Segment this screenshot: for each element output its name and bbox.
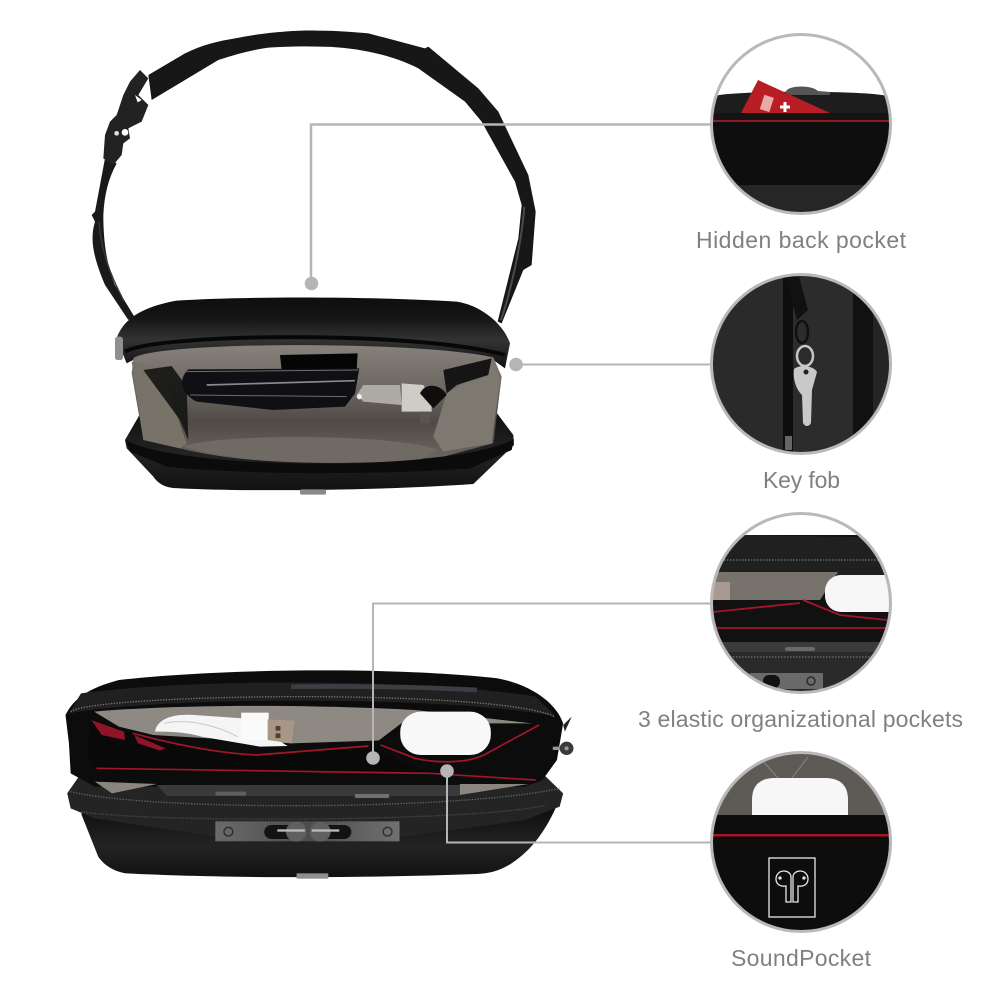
upper band and interior (65, 670, 563, 787)
detail photo: pockets close-up (713, 535, 889, 691)
leader line: key fob (509, 358, 710, 371)
phone and grey patches (95, 782, 157, 793)
bag lining (132, 345, 502, 463)
dark pocket one (88, 719, 425, 773)
bottom feet (297, 873, 328, 879)
detail photo: key on fob (713, 276, 889, 452)
right gusset (433, 363, 500, 452)
detail photo: card in pocket (713, 80, 889, 212)
dark pocket two (377, 723, 546, 773)
lower shell (81, 807, 556, 877)
lower bag: organizer view (65, 670, 573, 879)
label: key fob: Key fob (763, 467, 840, 493)
lower zipper band (67, 773, 563, 837)
bottom foot (300, 489, 326, 495)
right strap edge highlight (501, 207, 524, 320)
leader line: hidden back pocket (305, 124, 710, 290)
panel: SoundPocket (710, 751, 892, 966)
upper bag: open view with wallet and keys (115, 298, 514, 495)
panel: elastic organizational pockets (638, 510, 963, 732)
zipper pull (115, 337, 123, 360)
zipper seam (125, 337, 505, 355)
front plate with zipper pulls (215, 821, 400, 842)
leader line: SoundPocket (440, 764, 710, 842)
red tag (91, 720, 165, 751)
USB cable (155, 713, 295, 747)
left gusset (132, 362, 187, 448)
grey lining (94, 706, 532, 753)
leader line: elastic pockets (366, 604, 710, 765)
AirPods case (400, 712, 491, 755)
icon: earbuds (769, 858, 815, 917)
label: elastic pockets: 3 elastic organizational pockets (638, 706, 963, 732)
lower shell (125, 408, 514, 490)
bottom panel (183, 437, 438, 463)
key (357, 383, 447, 423)
upper zipper band (117, 298, 510, 368)
wallet (182, 368, 359, 410)
front lip (126, 439, 514, 473)
card behind wallet (280, 353, 358, 370)
red piping (96, 725, 539, 780)
detail photo: earbuds pocket (713, 754, 889, 930)
side zipper pull (553, 717, 573, 755)
label: hidden back pocket: Hidden back pocket (696, 227, 907, 253)
strap buckle (103, 70, 148, 165)
panel: hidden back pocket (696, 30, 907, 253)
main strap arc (148, 31, 536, 323)
shoulder strap (92, 31, 536, 323)
left strap (92, 158, 134, 320)
panel: key fob (710, 273, 892, 493)
label: SoundPocket: SoundPocket (731, 945, 872, 971)
